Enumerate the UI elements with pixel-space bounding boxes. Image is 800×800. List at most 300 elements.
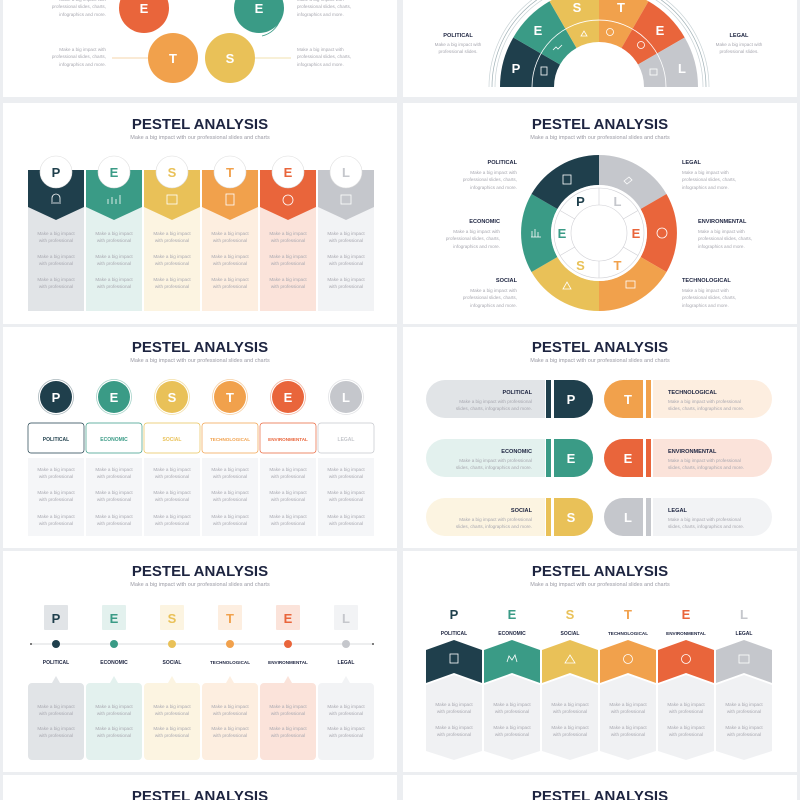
step texts: with professional xyxy=(39,733,73,738)
label: legal: LEGAL xyxy=(682,160,702,166)
chevron texts: with professional xyxy=(495,732,529,737)
label: economic: Make a big impact with xyxy=(453,229,500,234)
chevron texts: Make a big impact xyxy=(551,725,589,730)
circle: T orange xyxy=(112,33,198,83)
panel: slide F chevrons xyxy=(403,551,797,772)
label: legal xyxy=(716,33,763,54)
description bodies: with professional xyxy=(97,497,131,502)
step: economic: E xyxy=(110,611,119,626)
column: T: T xyxy=(226,165,234,180)
column texts: Make a big impact xyxy=(211,277,249,282)
chevron: legal: L xyxy=(740,607,748,622)
step: environmental xyxy=(260,605,316,760)
circle: S yellow: S xyxy=(226,51,235,66)
subtitle: Make a big impact with our professional slides and charts xyxy=(530,358,670,364)
label: technological: TECHNOLOGICAL xyxy=(682,278,731,284)
label: technological: infographics and more. xyxy=(682,303,729,308)
label: political: Make a big impact with xyxy=(435,42,482,47)
column texts: with professional xyxy=(271,261,305,266)
chevron texts: with professional xyxy=(553,709,587,714)
step texts: with professional xyxy=(329,733,363,738)
description bodies: with professional xyxy=(155,521,189,526)
text blocks: professional slides, charts, xyxy=(52,54,106,59)
title: PESTEL ANALYSIS xyxy=(132,116,268,133)
title: PESTEL ANALYSIS xyxy=(532,339,668,356)
title: PESTEL ANALYSIS xyxy=(132,563,268,580)
label: social: Make a big impact with xyxy=(470,288,517,293)
step texts: with professional xyxy=(329,711,363,716)
chevron texts: with professional xyxy=(611,709,645,714)
label: political: professional slides. xyxy=(438,49,478,54)
description bodies: with professional xyxy=(39,521,73,526)
chevron texts: Make a big impact xyxy=(609,725,647,730)
description bodies: with professional xyxy=(329,497,363,502)
column: L xyxy=(318,156,374,311)
circle: E orange: E xyxy=(140,1,149,16)
description bodies: Make a big impact xyxy=(269,514,307,519)
pill: economic xyxy=(426,439,593,477)
label: social xyxy=(463,278,518,308)
chevron: social xyxy=(542,607,598,760)
text blocks: infographics and more. xyxy=(297,12,344,17)
pill: economic: slides, charts, infographics and more. xyxy=(456,465,532,470)
pill: legal xyxy=(604,498,772,536)
chevron: social: SOCIAL xyxy=(561,631,579,637)
chevron: economic xyxy=(484,607,540,760)
step: environmental: ENVIRONMENTAL xyxy=(268,660,308,665)
step texts: Make a big impact xyxy=(269,726,307,731)
column texts: with professional xyxy=(97,261,131,266)
title: PESTEL ANALYSIS xyxy=(532,116,668,133)
description bodies: Make a big impact xyxy=(95,467,133,472)
step texts: with professional xyxy=(271,733,305,738)
column texts: Make a big impact xyxy=(95,231,133,236)
panel: slide A pentagon columns xyxy=(3,103,397,324)
column texts: with professional xyxy=(329,284,363,289)
pill: technological: Make a big impact with professional xyxy=(668,399,741,404)
pill: technological: TECHNOLOGICAL xyxy=(668,390,717,396)
text blocks xyxy=(52,0,351,67)
step texts: with professional xyxy=(213,711,247,716)
column texts: Make a big impact xyxy=(327,277,365,282)
column texts: with professional xyxy=(213,238,247,243)
description bodies: with professional xyxy=(329,521,363,526)
description bodies: Make a big impact xyxy=(95,514,133,519)
description bodies: Make a big impact xyxy=(327,467,365,472)
chevron texts: with professional xyxy=(495,709,529,714)
label: political: Make a big impact with xyxy=(470,170,517,175)
column texts: Make a big impact xyxy=(37,231,75,236)
donut chart: P xyxy=(576,194,585,209)
step: legal: LEGAL xyxy=(338,660,354,666)
step: political: P xyxy=(52,611,61,626)
panel: slide B donut xyxy=(403,103,797,324)
column texts: Make a big impact xyxy=(95,277,133,282)
column: environmental: E xyxy=(284,390,293,405)
column texts: with professional xyxy=(97,238,131,243)
text blocks: infographics and more. xyxy=(297,62,344,67)
panel: bottom-right slide (cropped) xyxy=(403,775,797,800)
chevron texts: with professional xyxy=(437,732,471,737)
column texts: Make a big impact xyxy=(327,254,365,259)
step texts: with professional xyxy=(97,711,131,716)
step texts xyxy=(37,704,365,738)
chevron texts: Make a big impact xyxy=(609,702,647,707)
arch chart xyxy=(489,0,709,87)
description bodies: with professional xyxy=(271,474,305,479)
description bodies: with professional xyxy=(39,474,73,479)
column: P: P xyxy=(52,165,61,180)
chevron texts: Make a big impact xyxy=(551,702,589,707)
chevron: legal: LEGAL xyxy=(736,631,752,637)
donut chart: T xyxy=(614,258,622,273)
pill: social xyxy=(426,498,593,536)
description bodies: with professional xyxy=(97,521,131,526)
pill: environmental xyxy=(604,439,772,477)
step texts: Make a big impact xyxy=(327,704,365,709)
column texts: with professional xyxy=(329,238,363,243)
description bodies: with professional xyxy=(271,497,305,502)
column: social: S xyxy=(168,390,177,405)
step texts: Make a big impact xyxy=(211,726,249,731)
description bodies: Make a big impact xyxy=(269,490,307,495)
pill: legal: L xyxy=(624,510,632,525)
chevron texts: Make a big impact xyxy=(493,702,531,707)
column texts: Make a big impact xyxy=(95,254,133,259)
description bodies: with professional xyxy=(155,474,189,479)
chevron: technological: TECHNOLOGICAL xyxy=(608,631,648,636)
chevron: economic: E xyxy=(508,607,517,622)
text blocks: professional slides, charts, xyxy=(297,4,351,9)
step: economic: ECONOMIC xyxy=(100,660,128,666)
step: political: POLITICAL xyxy=(43,660,69,666)
text blocks: Make a big impact with xyxy=(297,47,344,52)
column texts: Make a big impact xyxy=(327,231,365,236)
description bodies: with professional xyxy=(155,497,189,502)
pill: political xyxy=(426,380,593,418)
description bodies: Make a big impact xyxy=(37,514,75,519)
subtitle: Make a big impact with our professional slides and charts xyxy=(130,135,270,141)
subtitle: Make a big impact with our professional slides and charts xyxy=(530,582,670,588)
pill: economic: Make a big impact with professional xyxy=(459,458,532,463)
column texts: with professional xyxy=(39,261,73,266)
description bodies: with professional xyxy=(329,474,363,479)
column: political: POLITICAL xyxy=(43,437,69,443)
panel: top-left circles slide (cropped) xyxy=(3,0,397,97)
description bodies: Make a big impact xyxy=(269,467,307,472)
donut chart xyxy=(521,155,677,311)
step: legal xyxy=(318,605,374,760)
column: legal xyxy=(318,380,374,453)
column texts xyxy=(37,231,365,289)
label: economic xyxy=(446,219,500,249)
text blocks: professional slides, charts, xyxy=(297,54,351,59)
column texts: with professional xyxy=(39,238,73,243)
chevron: technological xyxy=(600,607,656,760)
chevron texts: with professional xyxy=(727,709,761,714)
column texts: with professional xyxy=(39,284,73,289)
pill: legal: Make a big impact with professional xyxy=(668,517,741,522)
description bodies: Make a big impact xyxy=(327,514,365,519)
description bodies: Make a big impact xyxy=(211,467,249,472)
column: political xyxy=(28,380,84,453)
label: environmental: professional slides, charts, xyxy=(698,236,752,241)
column: social xyxy=(144,380,200,453)
chevron: technological: T xyxy=(624,607,632,622)
donut chart: E xyxy=(632,226,641,241)
column: technological xyxy=(202,380,258,453)
chevron texts: with professional xyxy=(437,709,471,714)
pill: social: slides, charts, infographics and more. xyxy=(456,524,532,529)
donut chart: L xyxy=(614,194,622,209)
pill: technological: slides, charts, infographics and more. xyxy=(668,406,744,411)
column texts: with professional xyxy=(329,261,363,266)
step: political xyxy=(28,605,84,760)
pill: political: POLITICAL xyxy=(502,390,533,396)
description bodies: Make a big impact xyxy=(37,490,75,495)
column: legal: L xyxy=(342,390,350,405)
arch chart: E xyxy=(534,23,543,38)
label: legal: infographics and more. xyxy=(682,185,729,190)
label: legal: professional slides, charts, xyxy=(682,177,736,182)
label: environmental: infographics and more. xyxy=(698,244,745,249)
description bodies: with professional xyxy=(39,497,73,502)
chevron texts: Make a big impact xyxy=(725,725,763,730)
chevron: political xyxy=(426,607,482,760)
timeline line xyxy=(30,643,374,645)
title: PESTEL ANALYSIS xyxy=(132,339,268,356)
chevron texts: Make a big impact xyxy=(725,702,763,707)
column: legal: LEGAL xyxy=(338,437,354,443)
label: legal: Make a big impact with xyxy=(682,170,729,175)
label: economic: infographics and more. xyxy=(453,244,500,249)
description bodies: with professional xyxy=(97,474,131,479)
chevron: economic: ECONOMIC xyxy=(498,631,526,637)
label: environmental xyxy=(698,219,752,249)
column: E environmental xyxy=(260,156,316,311)
title: PESTEL ANALYSIS xyxy=(532,563,668,580)
column: technological: TECHNOLOGICAL xyxy=(210,437,250,442)
description bodies: with professional xyxy=(271,521,305,526)
text blocks: Make a big impact with xyxy=(59,47,106,52)
column: E economic xyxy=(86,156,142,311)
column: social: SOCIAL xyxy=(163,437,181,443)
column texts: Make a big impact xyxy=(153,277,191,282)
chevron texts: with professional xyxy=(669,709,703,714)
step: social: SOCIAL xyxy=(163,660,181,666)
step: social xyxy=(144,605,200,760)
description bodies: Make a big impact xyxy=(327,490,365,495)
panel: slide D pills xyxy=(403,327,797,548)
column: economic: ECONOMIC xyxy=(100,437,128,443)
step texts: Make a big impact xyxy=(153,726,191,731)
chevron texts: Make a big impact xyxy=(667,702,705,707)
label: social: professional slides, charts, xyxy=(463,295,517,300)
step texts: Make a big impact xyxy=(153,704,191,709)
step texts: with professional xyxy=(39,711,73,716)
column: P xyxy=(28,156,84,311)
description bodies: Make a big impact xyxy=(37,467,75,472)
column texts: Make a big impact xyxy=(211,254,249,259)
label: technological xyxy=(682,278,736,308)
step: legal: L xyxy=(342,611,350,626)
column texts: Make a big impact xyxy=(269,277,307,282)
description bodies: Make a big impact xyxy=(153,490,191,495)
pill: economic: E xyxy=(567,451,576,466)
label: political xyxy=(463,160,518,190)
pill: technological: T xyxy=(624,392,632,407)
label: legal: professional slides. xyxy=(719,49,759,54)
column texts: Make a big impact xyxy=(37,254,75,259)
panel: slide E timeline xyxy=(3,551,397,772)
description bodies: Make a big impact xyxy=(153,514,191,519)
pill: environmental: Make a big impact with professional xyxy=(668,458,741,463)
column: S xyxy=(144,156,200,311)
step: environmental: E xyxy=(284,611,293,626)
circle: E orange xyxy=(119,0,169,33)
subtitle: Make a big impact with our professional slides and charts xyxy=(530,135,670,141)
subtitle: Make a big impact with our professional slides and charts xyxy=(130,582,270,588)
chevron: environmental: ENVIRONMENTAL xyxy=(666,631,706,636)
step: technological: TECHNOLOGICAL xyxy=(210,660,250,665)
label: political xyxy=(435,33,482,54)
chevron: environmental xyxy=(658,607,714,760)
text blocks: infographics and more. xyxy=(59,62,106,67)
step texts: Make a big impact xyxy=(95,704,133,709)
chevron texts: Make a big impact xyxy=(435,702,473,707)
column texts: Make a big impact xyxy=(269,231,307,236)
label: economic: professional slides, charts, xyxy=(446,236,500,241)
step texts: with professional xyxy=(155,733,189,738)
description bodies: with professional xyxy=(213,497,247,502)
column: environmental: ENVIRONMENTAL xyxy=(268,437,308,442)
description bodies: Make a big impact xyxy=(211,514,249,519)
pill: legal: slides, charts, infographics and more. xyxy=(668,524,744,529)
column texts: Make a big impact xyxy=(153,254,191,259)
column texts: Make a big impact xyxy=(37,277,75,282)
pill: environmental: ENVIRONMENTAL xyxy=(668,449,717,455)
pill: environmental: slides, charts, infographics and more. xyxy=(668,465,744,470)
column texts: Make a big impact xyxy=(153,231,191,236)
pill: technological xyxy=(604,380,772,418)
column texts: Make a big impact xyxy=(211,231,249,236)
column: economic: E xyxy=(110,390,119,405)
step texts: Make a big impact xyxy=(37,726,75,731)
circle: E teal: E xyxy=(255,1,264,16)
step: economic xyxy=(86,605,142,760)
pill: legal: LEGAL xyxy=(668,508,688,514)
column texts: with professional xyxy=(155,284,189,289)
label: political: POLITICAL xyxy=(487,160,518,166)
pill: social: Make a big impact with professional xyxy=(459,517,532,522)
column texts: with professional xyxy=(213,284,247,289)
label: political: POLITICAL xyxy=(443,33,473,39)
panel: top-right arch slide (cropped) xyxy=(403,0,797,97)
arch chart: L xyxy=(678,61,686,76)
chevron: political: P xyxy=(450,607,459,622)
donut chart: E xyxy=(558,226,567,241)
label: legal xyxy=(682,160,736,190)
description bodies: Make a big impact xyxy=(95,490,133,495)
column texts: with professional xyxy=(271,284,305,289)
chevron: political: POLITICAL xyxy=(441,631,467,637)
label: technological: Make a big impact with xyxy=(682,288,729,293)
arch chart: S xyxy=(573,0,582,15)
label: legal: LEGAL xyxy=(730,33,749,39)
column: economic xyxy=(86,380,142,453)
pill: political: P xyxy=(567,392,576,407)
column texts: Make a big impact xyxy=(269,254,307,259)
column: technological: T xyxy=(226,390,234,405)
chevron: social: S xyxy=(566,607,575,622)
chevron texts: with professional xyxy=(727,732,761,737)
pill: political: Make a big impact with professional xyxy=(459,399,532,404)
pill: environmental: E xyxy=(624,451,633,466)
arch chart: T xyxy=(617,0,625,15)
column texts: with professional xyxy=(155,261,189,266)
pill: social: SOCIAL xyxy=(511,508,533,514)
label: technological: professional slides, charts, xyxy=(682,295,736,300)
pill: economic: ECONOMIC xyxy=(501,449,532,455)
step: technological xyxy=(202,605,258,760)
label: economic: ECONOMIC xyxy=(469,219,500,225)
step: social: S xyxy=(168,611,177,626)
step texts: Make a big impact xyxy=(211,704,249,709)
column: political: P xyxy=(52,390,61,405)
column texts: with professional xyxy=(271,238,305,243)
column: environmental xyxy=(260,380,316,453)
column: L: L xyxy=(342,165,350,180)
step: technological: T xyxy=(226,611,234,626)
chevron texts: with professional xyxy=(669,732,703,737)
chevron texts: Make a big impact xyxy=(493,725,531,730)
arch chart: P xyxy=(512,61,521,76)
step texts: Make a big impact xyxy=(269,704,307,709)
step texts: Make a big impact xyxy=(95,726,133,731)
step texts: with professional xyxy=(271,711,305,716)
step texts: with professional xyxy=(213,733,247,738)
description bodies: Make a big impact xyxy=(153,467,191,472)
pill: social: S xyxy=(567,510,576,525)
circle: T orange: T xyxy=(169,51,177,66)
chevron texts xyxy=(435,702,763,737)
label: political: professional slides, charts, xyxy=(463,177,517,182)
text blocks: infographics and more. xyxy=(59,12,106,17)
column: S: S xyxy=(168,165,177,180)
panel: slide C circles with label boxes xyxy=(3,327,397,548)
chevron: environmental: E xyxy=(682,607,691,622)
description bodies: Make a big impact xyxy=(211,490,249,495)
chevron texts: with professional xyxy=(553,732,587,737)
pill: political: slides, charts, infographics and more. xyxy=(456,406,532,411)
label: social: infographics and more. xyxy=(470,303,517,308)
chevron texts: Make a big impact xyxy=(435,725,473,730)
label: legal: Make a big impact with xyxy=(716,42,763,47)
step texts: with professional xyxy=(97,733,131,738)
donut chart: S xyxy=(576,258,585,273)
column texts: with professional xyxy=(213,261,247,266)
description bodies: with professional xyxy=(213,474,247,479)
chevron texts: Make a big impact xyxy=(667,725,705,730)
description bodies: with professional xyxy=(213,521,247,526)
step texts: with professional xyxy=(155,711,189,716)
panel: bottom-left slide (cropped) xyxy=(3,775,397,800)
column: E economic: E xyxy=(110,165,119,180)
text blocks: professional slides, charts, xyxy=(52,4,106,9)
step texts: Make a big impact xyxy=(327,726,365,731)
circle: S yellow xyxy=(205,33,291,83)
column: T xyxy=(202,156,258,311)
